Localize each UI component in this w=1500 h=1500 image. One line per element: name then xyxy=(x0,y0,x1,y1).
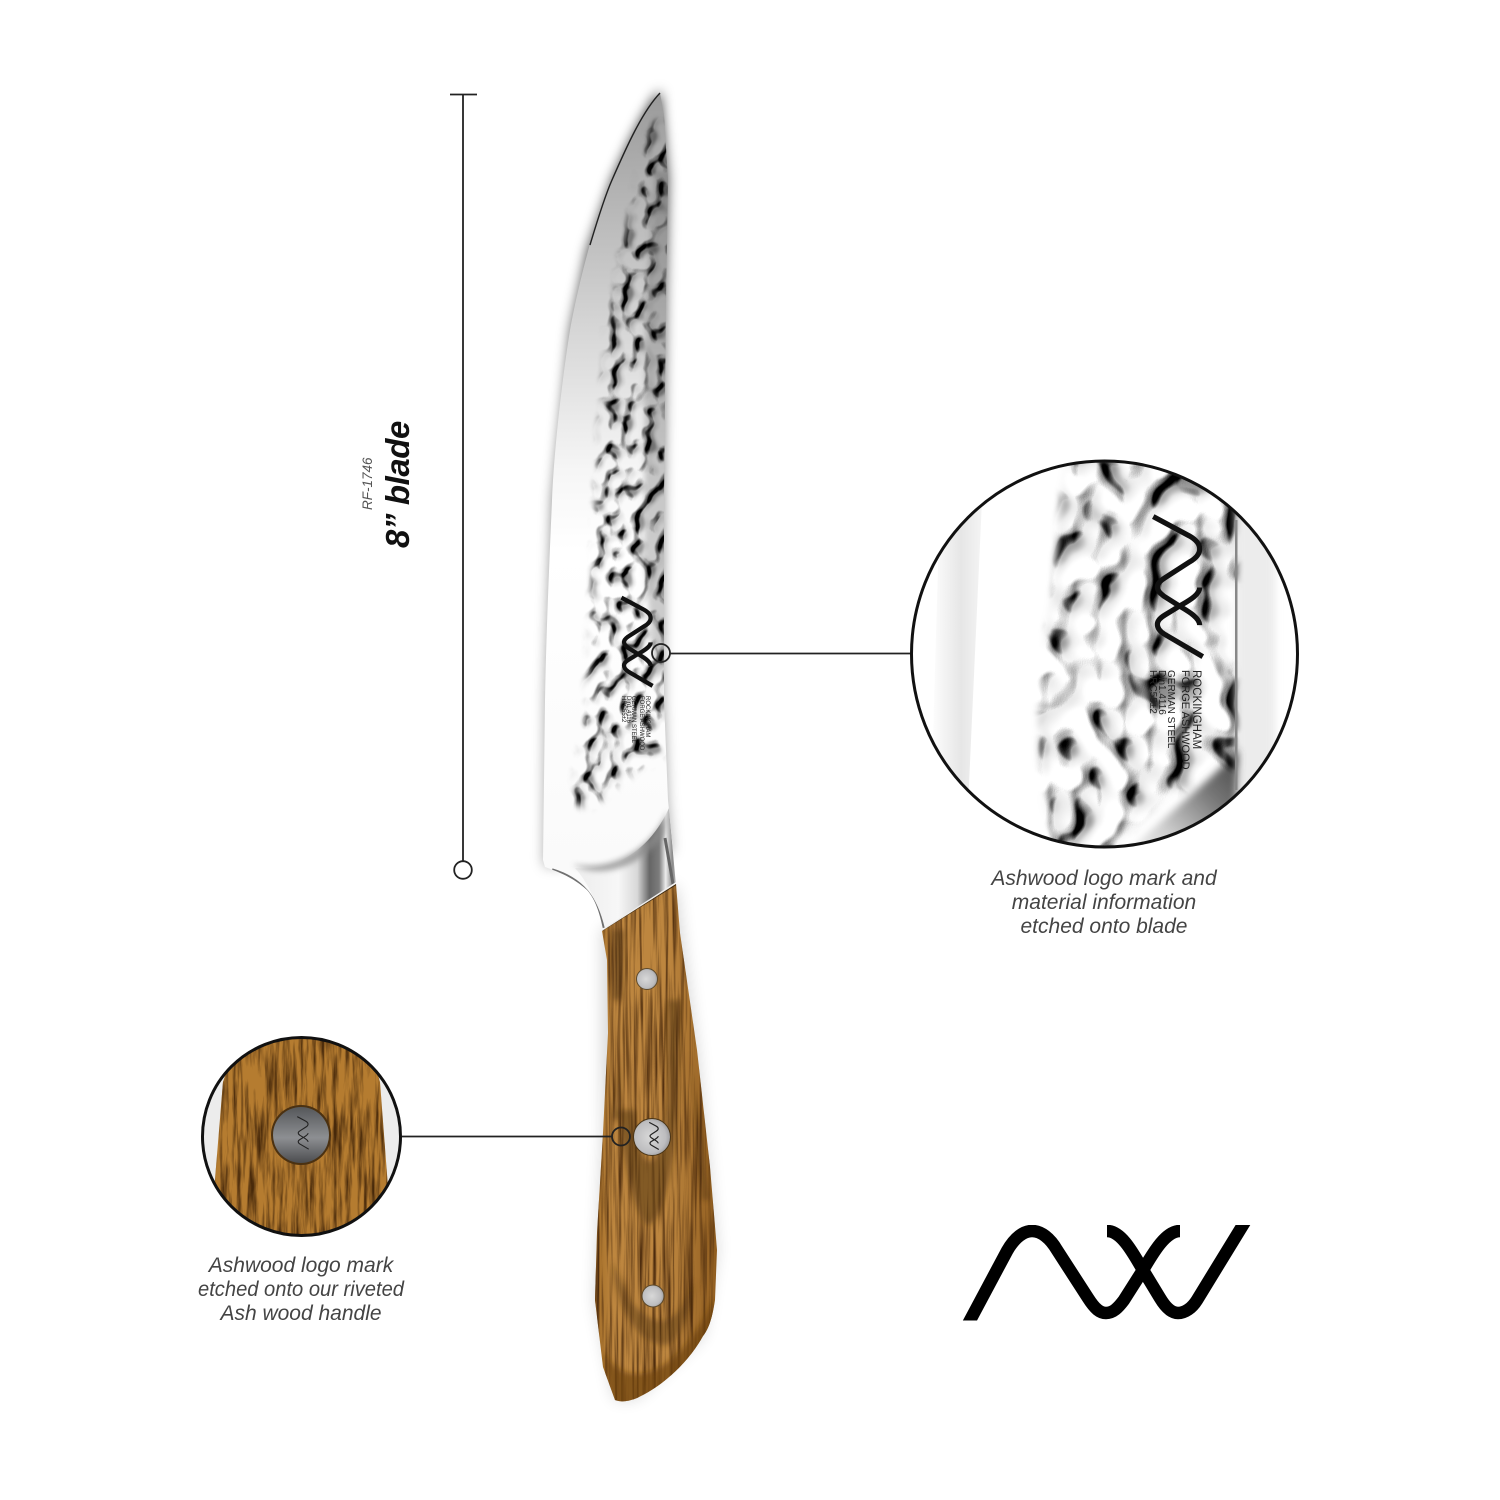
blade length label xyxy=(360,421,416,548)
magnified etched text: HRC55±2 xyxy=(1147,670,1158,714)
callout leader: blade xyxy=(652,644,911,662)
etched material text on blade xyxy=(620,696,650,751)
etched material text on blade: FORGE ASHWOOD xyxy=(638,696,644,751)
rivet top xyxy=(636,968,658,990)
knife xyxy=(530,90,720,1410)
brand logo mark xyxy=(967,1220,1246,1326)
magnified etched text: ROCKINGHAM xyxy=(1190,670,1202,749)
magnified logo xyxy=(1153,517,1203,657)
blade detail caption: material information xyxy=(1012,891,1196,914)
magnified etched text: GERMAN STEEL xyxy=(1165,670,1176,749)
handle detail caption xyxy=(198,1254,405,1325)
panel: blade detail magnified circle xyxy=(905,455,1305,870)
etched material text on blade: GERMAN STEEL xyxy=(630,696,636,744)
handle detail caption: Ash wood handle xyxy=(218,1302,382,1325)
dimension line: blade length xyxy=(450,94,477,879)
handle rivet enlarged xyxy=(271,1105,331,1165)
rivet bottom xyxy=(642,1285,664,1307)
handle detail caption: Ashwood logo mark xyxy=(207,1254,395,1277)
blade xyxy=(543,94,676,928)
rivet middle with logo xyxy=(634,1118,670,1156)
blade detail caption xyxy=(989,867,1218,938)
magnified etched text xyxy=(1147,670,1202,770)
blade cutting edge xyxy=(590,93,660,245)
etched logo on blade xyxy=(621,598,653,686)
knife shadow xyxy=(543,90,717,1400)
magnified dimple texture xyxy=(1034,462,1243,846)
blade detail caption: etched onto blade xyxy=(1021,915,1187,938)
wooden handle xyxy=(590,880,720,1410)
handle detail caption: etched onto our riveted xyxy=(198,1278,405,1301)
etched material text on blade: Din1.4116 xyxy=(625,696,631,724)
magnified etched text: FORGE ASHWOOD xyxy=(1179,670,1191,770)
etched material text on blade: ROCKINGHAM xyxy=(644,696,650,737)
blade detail caption: Ashwood logo mark and xyxy=(989,867,1218,890)
hammered dimple texture xyxy=(570,116,668,812)
callout leader: handle xyxy=(402,1128,630,1146)
etched material text on blade: HRC55±2 xyxy=(620,696,626,723)
blade length label: RF-1746 xyxy=(360,457,375,510)
magnified etched text: Din1.4116 xyxy=(1156,670,1167,715)
panel: handle detail magnified circle xyxy=(200,1030,405,1245)
blade length label: 8” blade xyxy=(379,421,416,548)
